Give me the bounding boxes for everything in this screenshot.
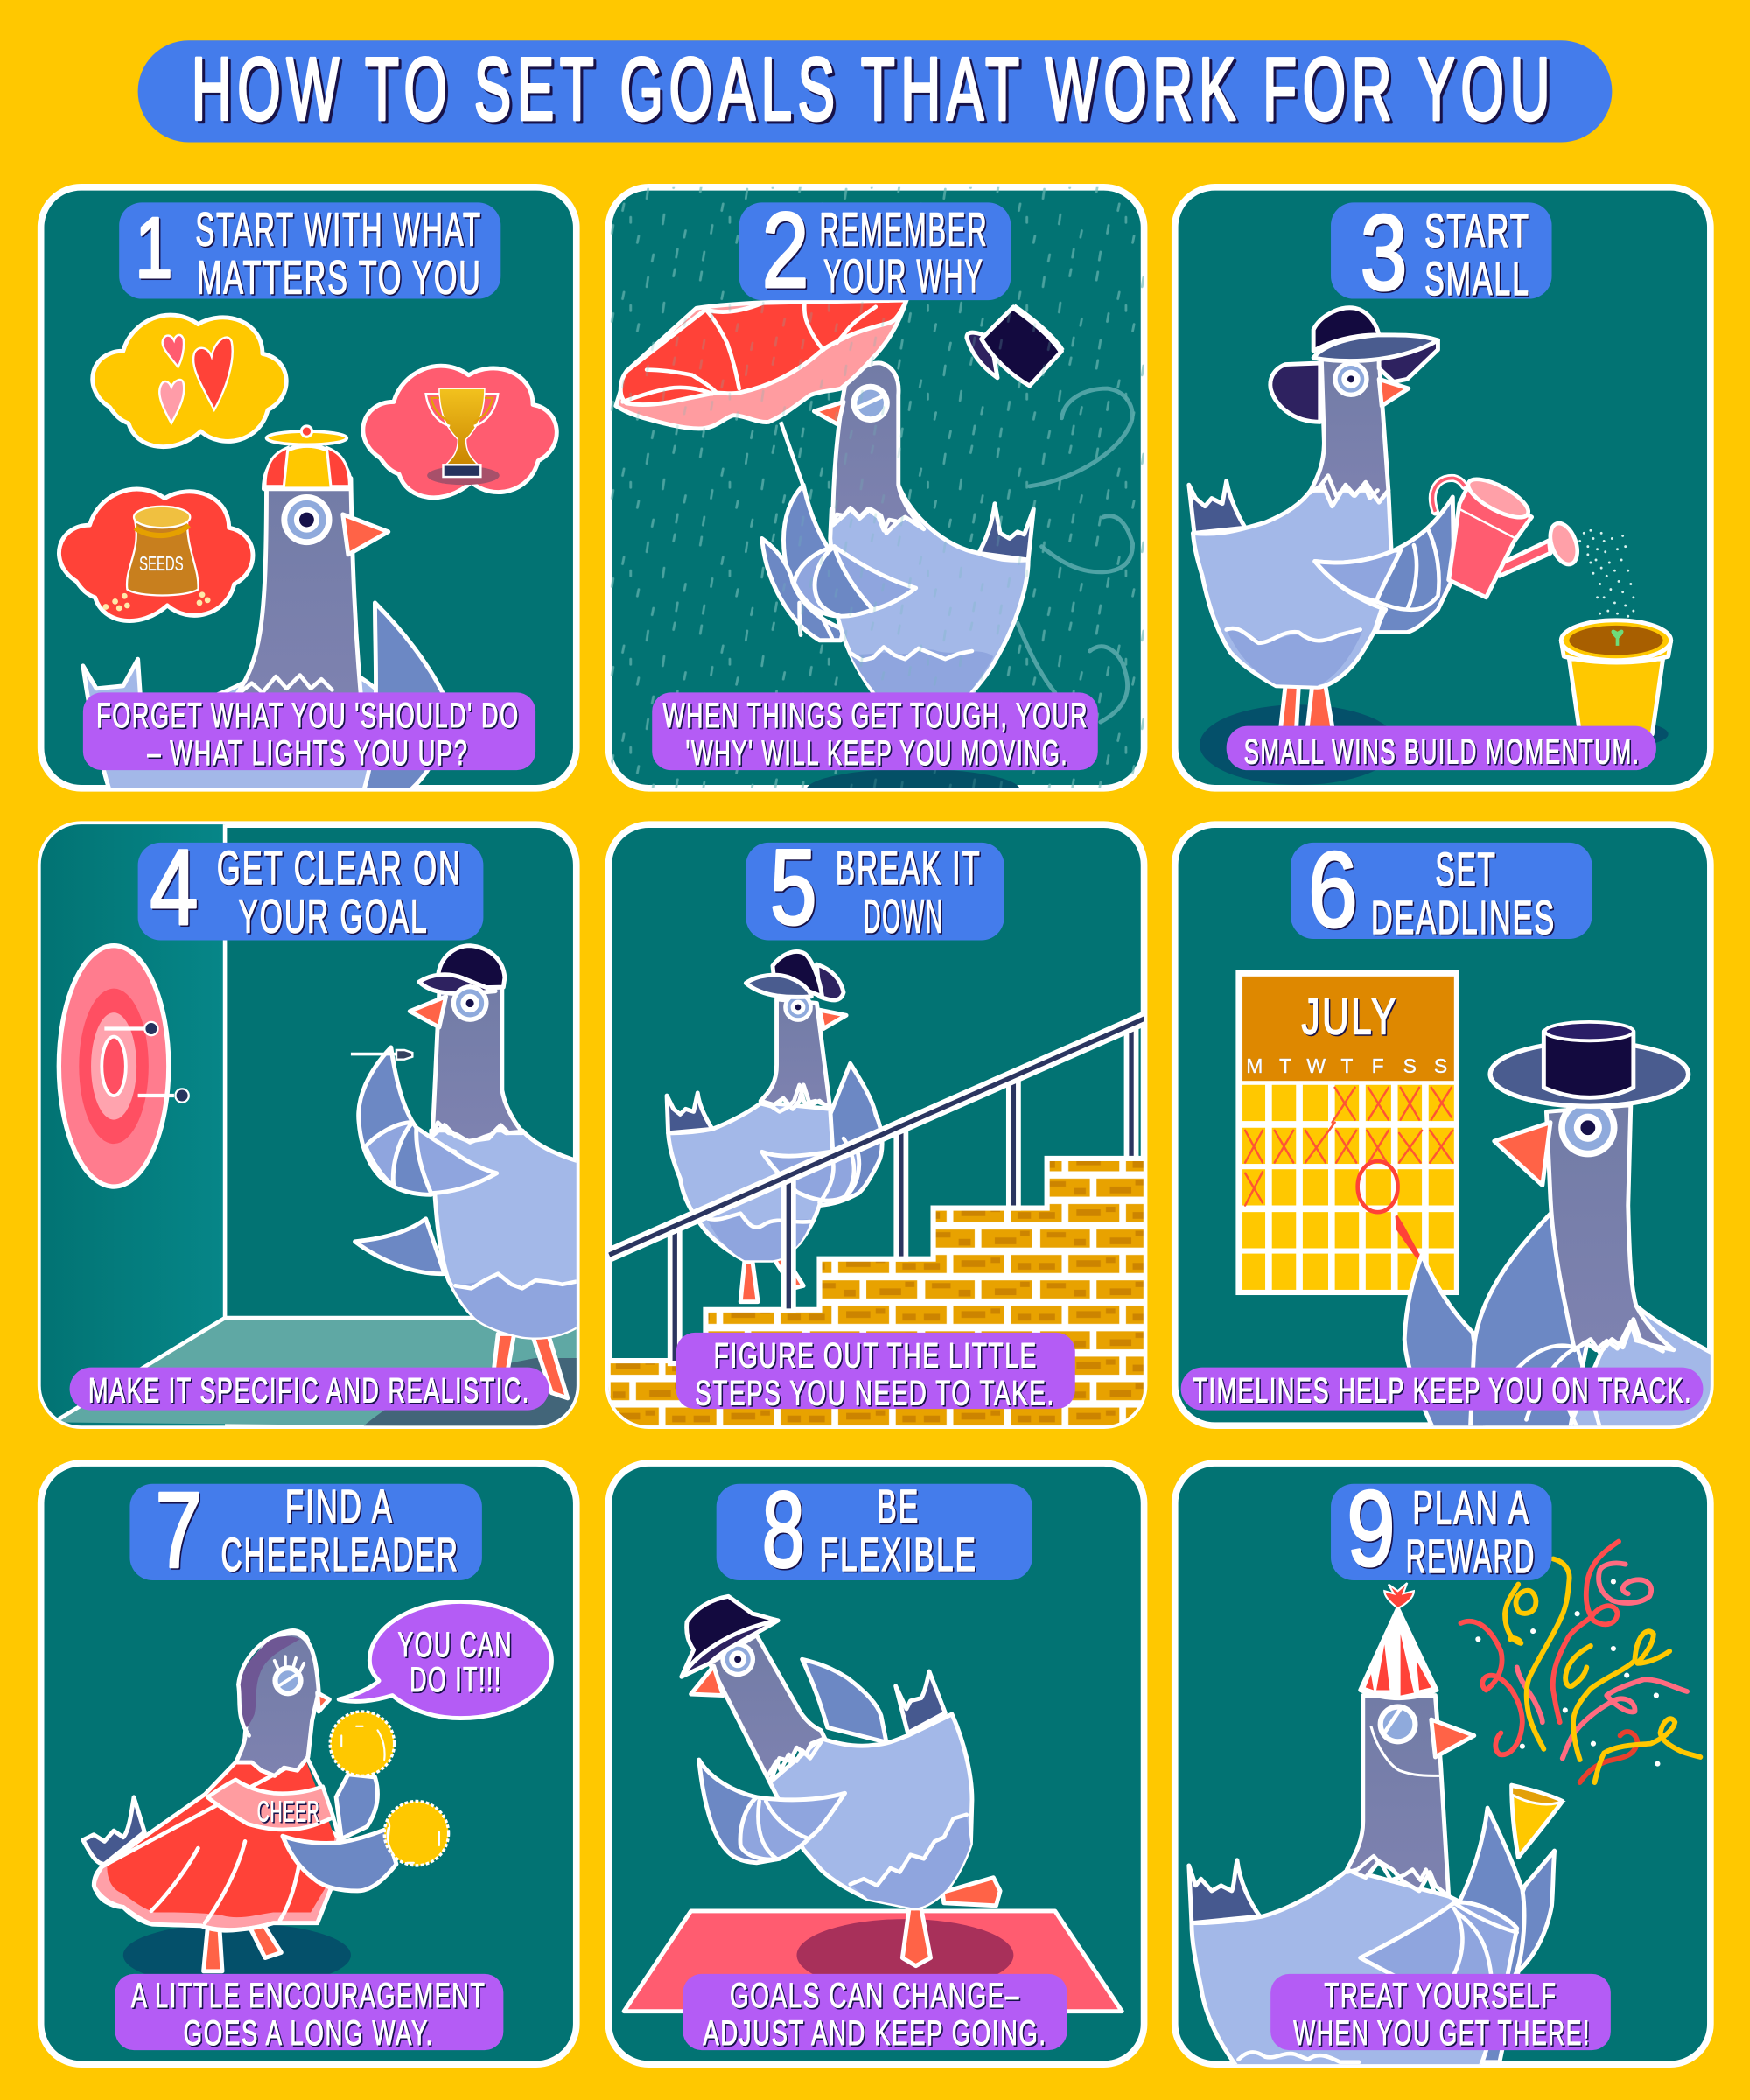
header 3: START	[1424, 206, 1530, 257]
header 9	[1331, 1468, 1552, 1588]
calendar: F	[1372, 1054, 1384, 1077]
panel 8: be flexible	[608, 1463, 1144, 2064]
caption 2: 'WHY' WILL KEEP YOU MOVING.	[685, 734, 1068, 773]
header 7	[130, 1470, 482, 1590]
brick stairs	[608, 1158, 1146, 1428]
header 9: REWARD	[1406, 1531, 1536, 1583]
thought cloud: trophy	[363, 366, 556, 498]
umbrella	[616, 300, 906, 490]
header 9: PLAN A	[1412, 1483, 1530, 1535]
wing 9 front	[1361, 1902, 1517, 2009]
pigeon 4	[351, 946, 583, 1398]
calendar: S	[1404, 1054, 1417, 1077]
header 7: CHEERLEADER	[220, 1530, 459, 1581]
pigeon 6	[1404, 1022, 1717, 1433]
caption 1	[83, 692, 536, 773]
pigeon 8	[682, 1596, 1000, 1966]
pigeon 9	[1189, 1583, 1555, 2068]
pigeon 2	[762, 363, 1033, 699]
caption 4	[70, 1368, 549, 1410]
calendar: T	[1279, 1054, 1292, 1077]
calendar: T	[1340, 1054, 1353, 1077]
dartboard	[59, 946, 189, 1186]
header 8: BE	[877, 1481, 920, 1533]
room	[40, 823, 578, 1428]
railing	[609, 1018, 1146, 1366]
header 1: 1	[136, 200, 172, 296]
header 4: YOUR GOAL	[238, 891, 429, 942]
header 1: START WITH WHAT	[195, 204, 482, 256]
header 8: FLEXIBLE	[819, 1530, 977, 1581]
header 7: 7	[156, 1470, 202, 1590]
pigeon 7 cheerleader	[83, 1630, 396, 1971]
calendar: M	[1246, 1054, 1263, 1077]
red marker circle and pencil	[1358, 1161, 1422, 1262]
pigeon 7 cheerleader: CHEER	[257, 1796, 320, 1828]
calendar	[1236, 970, 1460, 1295]
thought cloud: seeds: SEEDS	[139, 552, 184, 575]
pom poms	[330, 1712, 449, 1866]
header 4: 4	[150, 827, 198, 947]
caption 9: TREAT YOURSELF	[1324, 1977, 1558, 2015]
legs 3	[1279, 686, 1334, 726]
header 5: BREAK IT	[836, 843, 982, 894]
panel 3: start small	[1175, 187, 1711, 788]
thought cloud: seeds	[59, 489, 253, 621]
caption 9: WHEN YOU GET THERE!	[1293, 2014, 1591, 2053]
caption 7: A LITTLE ENCOURAGEMENT	[131, 1977, 486, 2015]
panel 5: break it down	[608, 824, 1146, 1428]
header 7: FIND A	[285, 1481, 394, 1533]
header 5: DOWN	[864, 891, 944, 942]
speech bubble	[339, 1601, 551, 1718]
header 6: DEADLINES	[1371, 892, 1556, 944]
header 8	[717, 1470, 1032, 1590]
caption 4: MAKE IT SPECIFIC AND REALISTIC.	[88, 1371, 530, 1410]
caption 8: GOALS CAN CHANGE–	[730, 1977, 1020, 2015]
header 3: SMALL	[1424, 254, 1530, 305]
header 1	[119, 200, 500, 304]
calendar: W	[1306, 1054, 1326, 1077]
speech bubble: DO IT!!!	[410, 1661, 502, 1699]
caption 3	[1227, 726, 1656, 772]
watering can	[1432, 472, 1583, 598]
water spray	[1580, 530, 1634, 621]
header 6	[1291, 830, 1592, 949]
panel 1: start with what matters	[41, 187, 577, 803]
header 1: MATTERS TO YOU	[197, 252, 482, 304]
panel 9: plan a reward	[1175, 1463, 1711, 2068]
header 4	[138, 827, 483, 947]
caption 2: WHEN THINGS GET TOUGH, YOUR	[662, 696, 1088, 735]
calendar: S	[1434, 1054, 1447, 1077]
caption 9	[1270, 1974, 1611, 2053]
header 3	[1331, 192, 1552, 312]
header 6: 6	[1308, 830, 1358, 949]
caption 5: STEPS YOU NEED TO TAKE.	[695, 1375, 1055, 1413]
caption 8: ADJUST AND KEEP GOING.	[703, 2014, 1047, 2053]
caption 7: GOES A LONG WAY.	[184, 2014, 434, 2053]
caption 5	[676, 1333, 1075, 1413]
caption 7	[116, 1974, 503, 2053]
pigeon 3	[1189, 308, 1454, 687]
flower pot	[1561, 620, 1671, 734]
header 5: 5	[770, 827, 816, 947]
header 5	[746, 827, 1004, 947]
header 2: 2	[762, 190, 808, 310]
wind swirls	[1018, 388, 1133, 722]
party horn	[1512, 1785, 1563, 1858]
header 6: SET	[1435, 844, 1497, 896]
header 2: YOUR WHY	[823, 251, 984, 303]
thought cloud: hearts	[93, 315, 286, 447]
header 2: REMEMBER	[819, 204, 988, 256]
yoga mat	[624, 1911, 1122, 2012]
panel 6: set deadlines	[1175, 824, 1717, 1433]
header 9: 9	[1347, 1468, 1395, 1588]
header 8: 8	[762, 1470, 805, 1590]
panel 4: get clear on your goal	[40, 823, 583, 1428]
header 3: 3	[1361, 192, 1407, 312]
header 2	[739, 190, 1011, 310]
caption 1: FORGET WHAT YOU 'SHOULD' DO	[96, 696, 520, 735]
caption 1: – WHAT LIGHTS YOU UP?	[147, 734, 469, 773]
caption 2	[652, 692, 1098, 773]
panel 7: find a cheerleader	[41, 1463, 577, 2064]
header 4: GET CLEAR ON	[217, 843, 462, 894]
pigeon 1	[83, 426, 445, 803]
flying top hat	[967, 307, 1061, 386]
caption 5: FIGURE OUT THE LITTLE	[714, 1337, 1038, 1376]
speech bubble: YOU CAN	[397, 1626, 513, 1664]
caption 8	[682, 1974, 1068, 2053]
panel 2: remember your why	[608, 186, 1146, 812]
pigeon 5	[667, 951, 882, 1302]
confetti streamers	[1460, 1542, 1700, 1782]
calendar: JULY	[1301, 989, 1398, 1046]
